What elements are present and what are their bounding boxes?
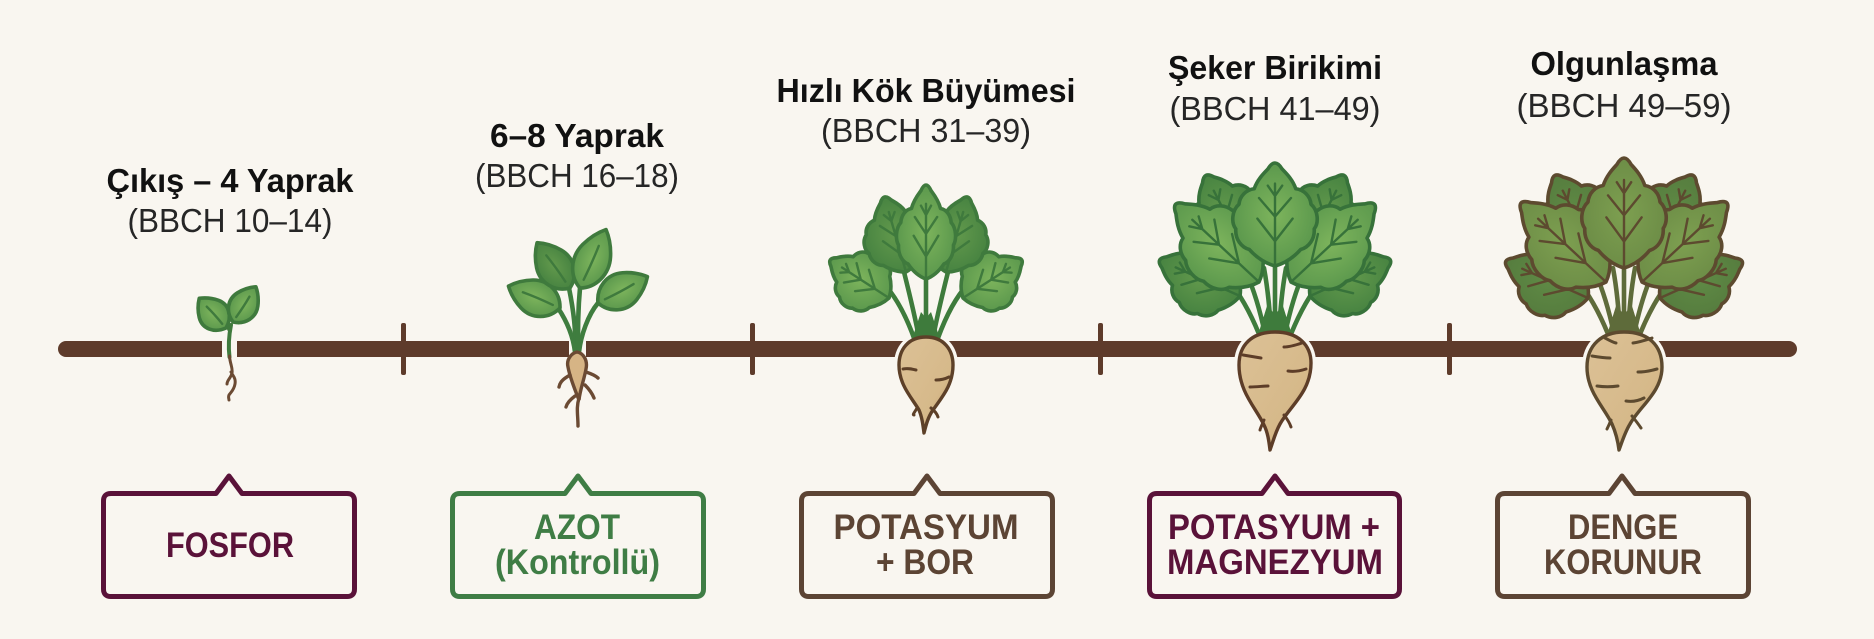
stage 2 heading: 6–8 Yaprak [490,117,665,154]
stage 3 heading: (BBCH 31–39) [821,112,1031,149]
icon: sugar beet, sugar accumulation [1145,158,1405,450]
callout: POTASYUM + MAGNEZYUM: MAGNEZYUM [1167,543,1383,582]
callout: FOSFOR [104,476,354,596]
stage 1 heading [106,162,354,239]
callout: POTASYUM + BOR: POTASYUM [834,508,1018,547]
stage 5 heading: (BBCH 49–59) [1516,87,1732,124]
stage 5 heading: Olgunlaşma [1530,45,1718,82]
stage 2 heading [475,117,679,194]
callout: POTASYUM + BOR: + BOR [876,543,974,582]
callout: POTASYUM + BOR [802,476,1052,596]
stage 5 heading [1516,45,1732,124]
icon: mature sugar beet with aging leaves [1491,158,1757,450]
callout: DENGE KORUNUR: KORUNUR [1544,543,1702,582]
stage 4 heading: Şeker Birikimi [1168,49,1382,86]
stage 2 heading: (BBCH 16–18) [475,157,679,194]
icon: young plant with small root [502,222,656,426]
timeline with tick marks [58,323,1797,375]
stage 3 heading [776,72,1076,149]
stage 3 heading: Hızlı Kök Büyümesi [776,72,1076,109]
stage 1 heading: Çıkış – 4 Yaprak [106,162,354,199]
callout: AZOT: (Kontrollü) [495,543,660,582]
icon: sugar beet, rapid root growth [814,185,1038,433]
callout: FOSFOR: FOSFOR [166,526,294,565]
callout: DENGE KORUNUR [1498,476,1748,596]
stage 4 heading: (BBCH 41–49) [1170,90,1380,127]
icon: seedling [188,279,268,400]
callout: DENGE KORUNUR: DENGE [1568,508,1678,547]
stage 4 heading [1168,49,1382,127]
callout: AZOT: AZOT [534,508,620,547]
stage 1 heading: (BBCH 10–14) [128,202,332,239]
callout: AZOT [452,476,704,596]
callout: POTASYUM + MAGNEZYUM: POTASYUM + [1168,508,1380,547]
callout: POTASYUM + MAGNEZYUM [1150,476,1400,596]
